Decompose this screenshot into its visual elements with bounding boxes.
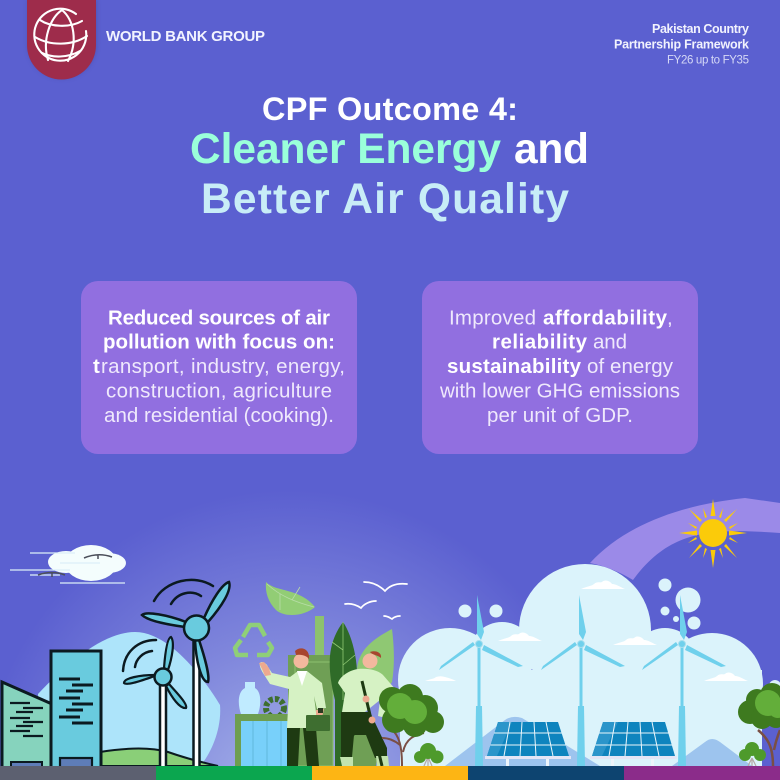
title [190, 91, 589, 223]
panel: air pollution sources: t [93, 355, 100, 378]
plant leaves [330, 622, 394, 766]
icon: recycling arrows [235, 625, 272, 655]
building: blue tower [51, 651, 101, 768]
tree: small right [739, 742, 766, 766]
panel: air pollution sources: pollution with focus on: [103, 330, 335, 354]
panel: air pollution sources: ransport, industry, energy, [101, 355, 345, 378]
title: Better Air Quality [201, 176, 569, 223]
factory [288, 616, 333, 766]
tree: right [738, 683, 780, 766]
panel: affordable, reliable, sustainable energy: Improved [449, 306, 536, 330]
panel: affordable, reliable, sustainable energy: of energy [587, 355, 674, 378]
wind turbine: light 2 [541, 595, 625, 766]
panel: affordable, reliable, sustainable energy: , [667, 306, 673, 330]
panel: affordable, reliable, sustainable energy: with lower GHG emissions [439, 380, 680, 402]
small white clouds [425, 581, 748, 681]
mountains [445, 717, 752, 766]
arc: purple sky swoosh [590, 498, 780, 580]
bottom colour bar [0, 766, 780, 780]
icon: bottle [239, 682, 260, 714]
wind turbine: light 3 [642, 595, 726, 766]
panel: air pollution sources: construction, agriculture [106, 380, 332, 402]
person: engineer in lab coat [259, 648, 330, 766]
left cloud with birds [10, 545, 126, 583]
wind turbine: small dark outline [123, 637, 186, 768]
title: and [514, 126, 589, 173]
header: framework label: FY26 up to FY35 [667, 54, 749, 66]
tree: middle [379, 684, 444, 766]
solar panel: left [485, 722, 571, 766]
solar panel: right [590, 722, 677, 766]
panel: air pollution sources: and residential (cooking). [104, 404, 334, 427]
panel: air pollution sources [81, 281, 357, 454]
panel: affordable, reliable, sustainable energy: per unit of GDP. [487, 404, 633, 427]
header: framework label [614, 22, 749, 66]
building: teal left [2, 682, 52, 768]
tree: small middle [414, 743, 444, 766]
white birds [345, 582, 407, 619]
panel: affordable, reliable, sustainable energy [422, 281, 698, 454]
header: framework label: Pakistan Country [652, 22, 749, 36]
logo: World Bank Group [27, 0, 265, 80]
green hill [100, 749, 218, 766]
title: Cleaner Energy [190, 126, 501, 173]
person: worker with stick [338, 651, 396, 766]
wind turbine: large dark outline [142, 580, 230, 768]
panel: air pollution sources: Reduced sources of air [108, 306, 330, 330]
big pale blue cloud [398, 564, 780, 766]
panel: affordable, reliable, sustainable energy: reliability [492, 330, 588, 354]
leaf floating [266, 582, 315, 615]
panel: affordable, reliable, sustainable energy: and [593, 330, 627, 354]
header: framework label: Partnership Framework [614, 38, 749, 52]
icon: sun [679, 499, 747, 568]
panel: affordable, reliable, sustainable energy: sustainability [447, 355, 582, 378]
icon: gear [266, 699, 284, 717]
logo: World Bank Group: WORLD BANK GROUP [106, 28, 265, 45]
machine box [235, 714, 305, 766]
title: CPF Outcome 4: [262, 91, 518, 127]
panel: affordable, reliable, sustainable energy: affordability [543, 306, 668, 330]
light blue blob behind city [38, 632, 220, 766]
wind turbine: light 1 [439, 595, 523, 766]
